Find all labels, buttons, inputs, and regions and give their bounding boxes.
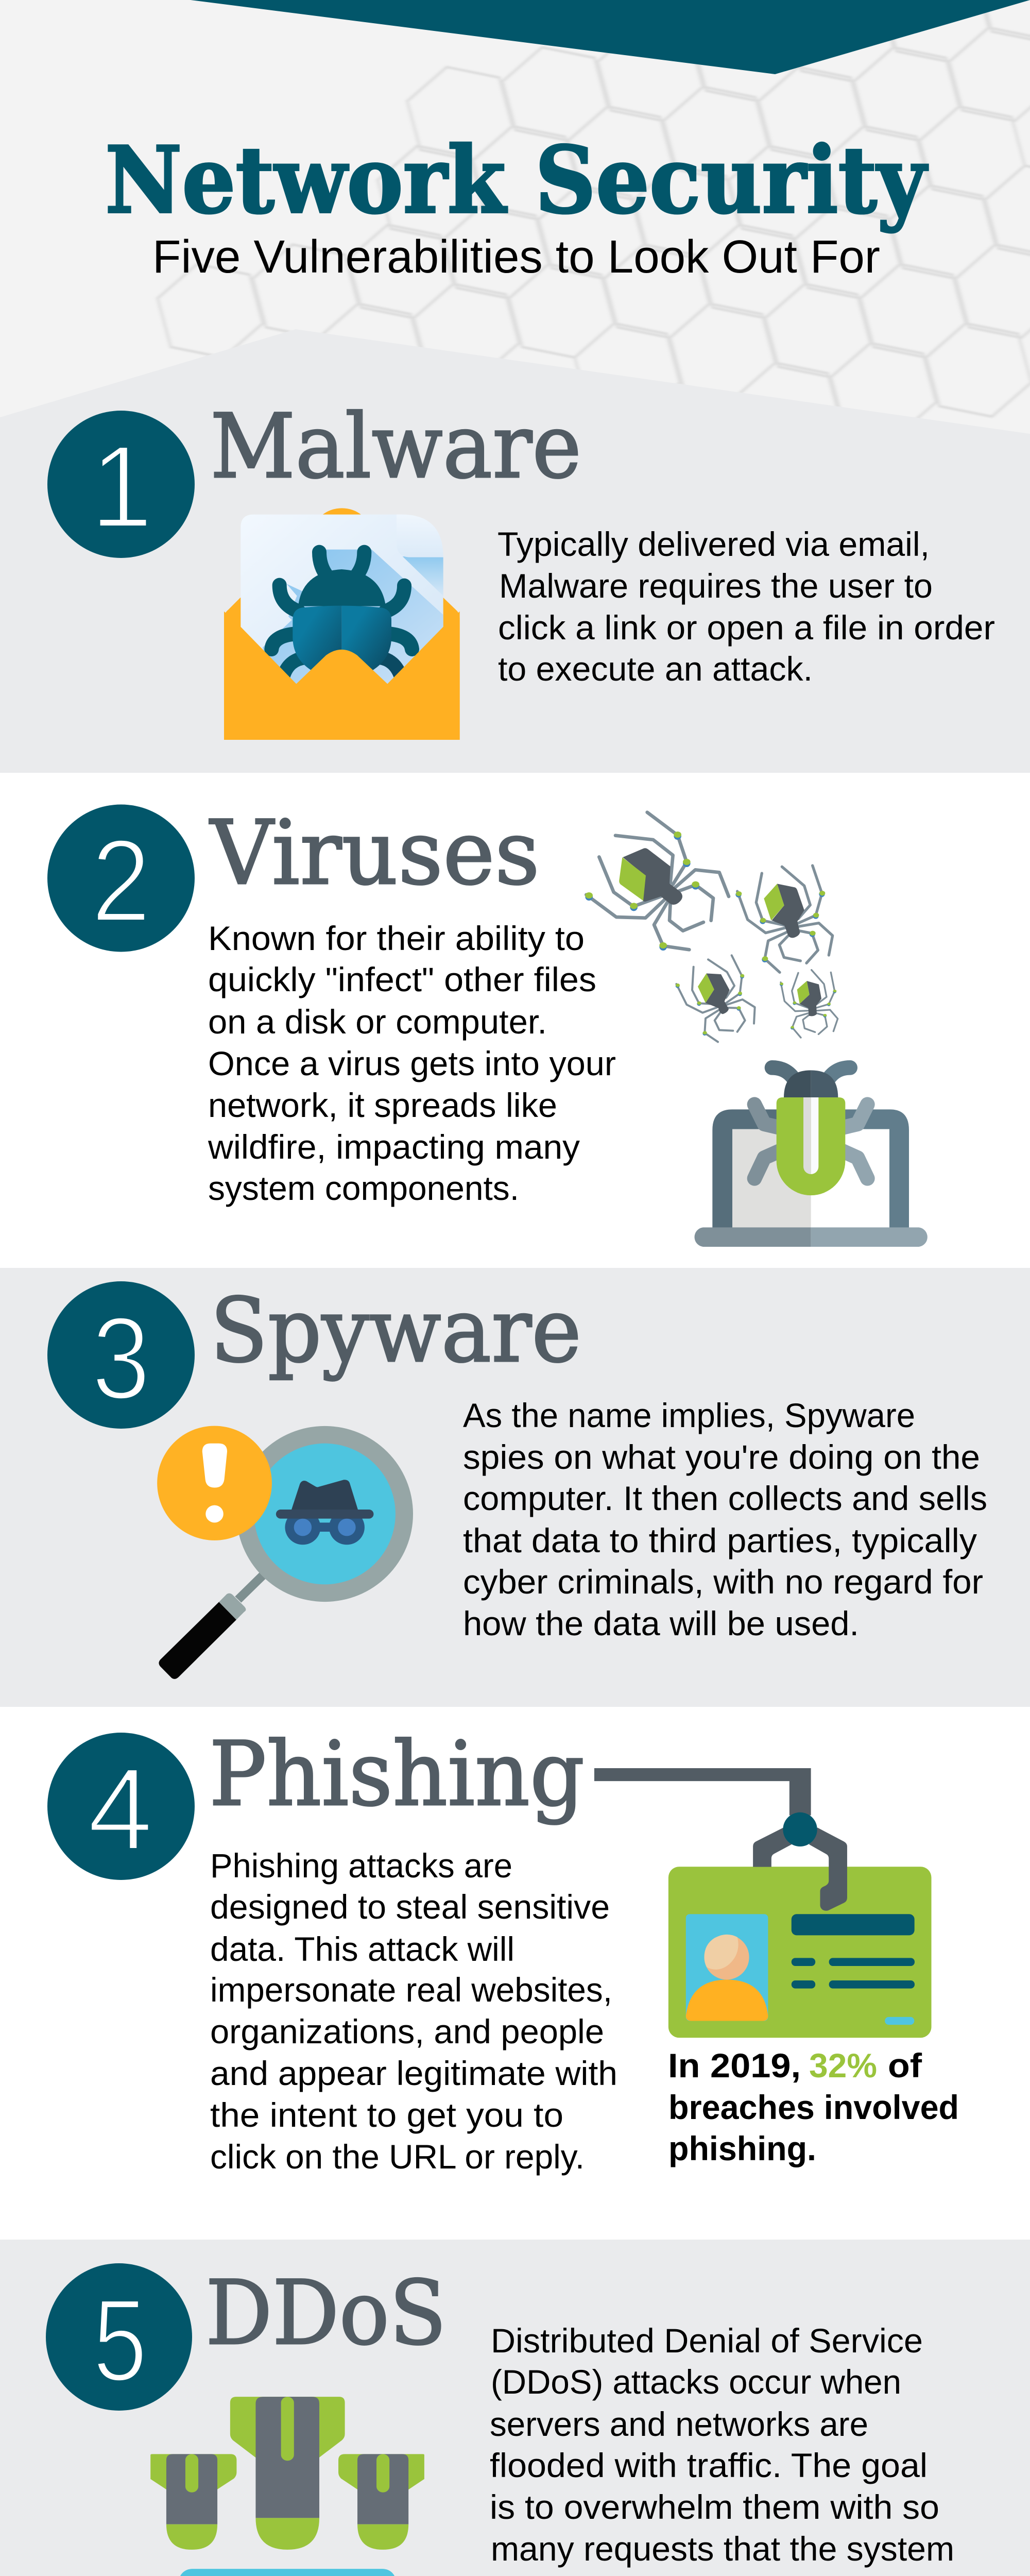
callout: 32% of breaches: breaches involved bbox=[668, 2088, 959, 2126]
text: malware description bbox=[497, 525, 995, 688]
smallest spider bbox=[780, 970, 838, 1038]
icon: infected email envelope bbox=[224, 508, 460, 740]
panel: viruses bbox=[0, 773, 1030, 1268]
middle bomb bbox=[230, 2397, 345, 2550]
panel: malware bbox=[0, 329, 1030, 773]
text: ddos description: servers and networks are bbox=[490, 2405, 868, 2443]
text: ddos description: many requests that the system bbox=[491, 2530, 954, 2568]
heading: Phishing: Phishing bbox=[209, 1722, 585, 1826]
callout: 32% of breaches bbox=[668, 2046, 959, 2167]
text: ddos description: is to overwhelm them with so bbox=[490, 2488, 939, 2526]
number badge 1 bbox=[47, 411, 195, 558]
small spider bbox=[676, 955, 755, 1042]
text: phishing description: the intent to get you to bbox=[210, 2096, 563, 2134]
text: malware description: Malware requires the user to bbox=[499, 567, 933, 605]
heading: DDoS: DDoS bbox=[205, 2261, 447, 2365]
text: spyware description: that data to third parties, typically bbox=[463, 1521, 977, 1560]
panel: spyware bbox=[0, 1268, 1030, 1707]
text: spyware description: spies on what you're doing on the bbox=[463, 1438, 980, 1476]
text: malware description: Typically delivered via email, bbox=[497, 525, 930, 563]
callout: 32% of breaches: 32% bbox=[809, 2046, 877, 2084]
text: malware description: to execute an attack. bbox=[498, 650, 813, 688]
text: viruses description: on a disk or computer. bbox=[208, 1003, 547, 1041]
right bomb bbox=[338, 2454, 424, 2550]
text: phishing description: organizations, and people bbox=[210, 2012, 604, 2050]
text: ddos description bbox=[490, 2321, 975, 2576]
text: malware description: click a link or open a file in order bbox=[498, 608, 995, 647]
text: spyware description bbox=[463, 1396, 987, 1642]
text: viruses description: network, it spreads like bbox=[208, 1086, 557, 1124]
icon: bug on laptop bbox=[695, 1067, 928, 1247]
text: viruses description bbox=[208, 919, 616, 1207]
callout: 32% of breaches: In 2019, bbox=[668, 2046, 801, 2084]
header background bbox=[0, 0, 1030, 464]
big spider bbox=[585, 812, 729, 951]
text: ddos description: Distributed Denial of Service bbox=[491, 2321, 923, 2360]
text: spyware description: cyber criminals, with no regard for bbox=[463, 1563, 983, 1601]
text: spyware description: how the data will be used. bbox=[463, 1604, 859, 1642]
number badge 3: 3 bbox=[92, 1293, 150, 1424]
number badge 5 bbox=[46, 2263, 192, 2411]
number badge 2 bbox=[47, 805, 195, 952]
text: viruses description: wildfire, impacting many bbox=[208, 1128, 580, 1166]
number badge 5: 5 bbox=[93, 2275, 147, 2406]
text: phishing description: designed to steal sensitive bbox=[210, 1888, 610, 1926]
text: phishing description: Phishing attacks are bbox=[210, 1846, 512, 1885]
text: viruses description: quickly "infect" other files bbox=[208, 960, 596, 998]
number badge 4 bbox=[47, 1733, 195, 1880]
heading: Viruses: Viruses bbox=[209, 801, 540, 905]
heading: Malware: Malware bbox=[210, 395, 581, 498]
text: phishing description bbox=[210, 1846, 617, 2176]
number badge 4: 4 bbox=[88, 1744, 153, 1875]
number badge 2: 2 bbox=[91, 816, 151, 946]
icon: magnifier with spy bbox=[157, 1426, 413, 1679]
text: phishing description: data. This attack will bbox=[210, 1930, 514, 1968]
top banner shape bbox=[191, 0, 1030, 74]
text: ddos description: (DDoS) attacks occur when bbox=[491, 2363, 901, 2401]
callout: 32% of breaches: phishing. bbox=[668, 2129, 816, 2167]
number badge 1: 1 bbox=[90, 421, 153, 552]
text: spyware description: As the name implies, Spyware bbox=[463, 1396, 915, 1434]
number badge 3 bbox=[47, 1281, 195, 1429]
text: phishing description: and appear legitimate with bbox=[210, 2054, 617, 2092]
medium spider bbox=[735, 866, 833, 972]
text: phishing description: impersonate real websites, bbox=[210, 1971, 612, 2009]
icon: hooked ID card bbox=[594, 1768, 932, 2038]
text: viruses description: Once a virus gets into your bbox=[208, 1044, 616, 1082]
subtitle: Five Vulnerabilities to Look Out For bbox=[152, 231, 880, 283]
text: viruses description: system components. bbox=[208, 1169, 519, 1207]
text: viruses description: Known for their ability to bbox=[208, 919, 585, 957]
server bbox=[179, 2569, 396, 2576]
hexagon pattern bbox=[156, 12, 1030, 418]
icon: bombs over server bbox=[150, 2397, 424, 2576]
heading: Spyware: Spyware bbox=[210, 1279, 581, 1382]
callout: 32% of breaches: of bbox=[888, 2046, 922, 2084]
title: Network Security bbox=[105, 126, 928, 234]
text: phishing description: click on the URL or reply. bbox=[210, 2138, 585, 2176]
text: ddos description: flooded with traffic. The goal bbox=[490, 2446, 928, 2484]
panel: phishing bbox=[0, 1707, 1030, 2240]
text: spyware description: computer. It then collects and sells bbox=[463, 1479, 987, 1517]
panel: ddos bbox=[0, 2240, 1030, 2576]
left bomb bbox=[150, 2454, 236, 2550]
icon: four spiders bbox=[585, 812, 838, 1042]
